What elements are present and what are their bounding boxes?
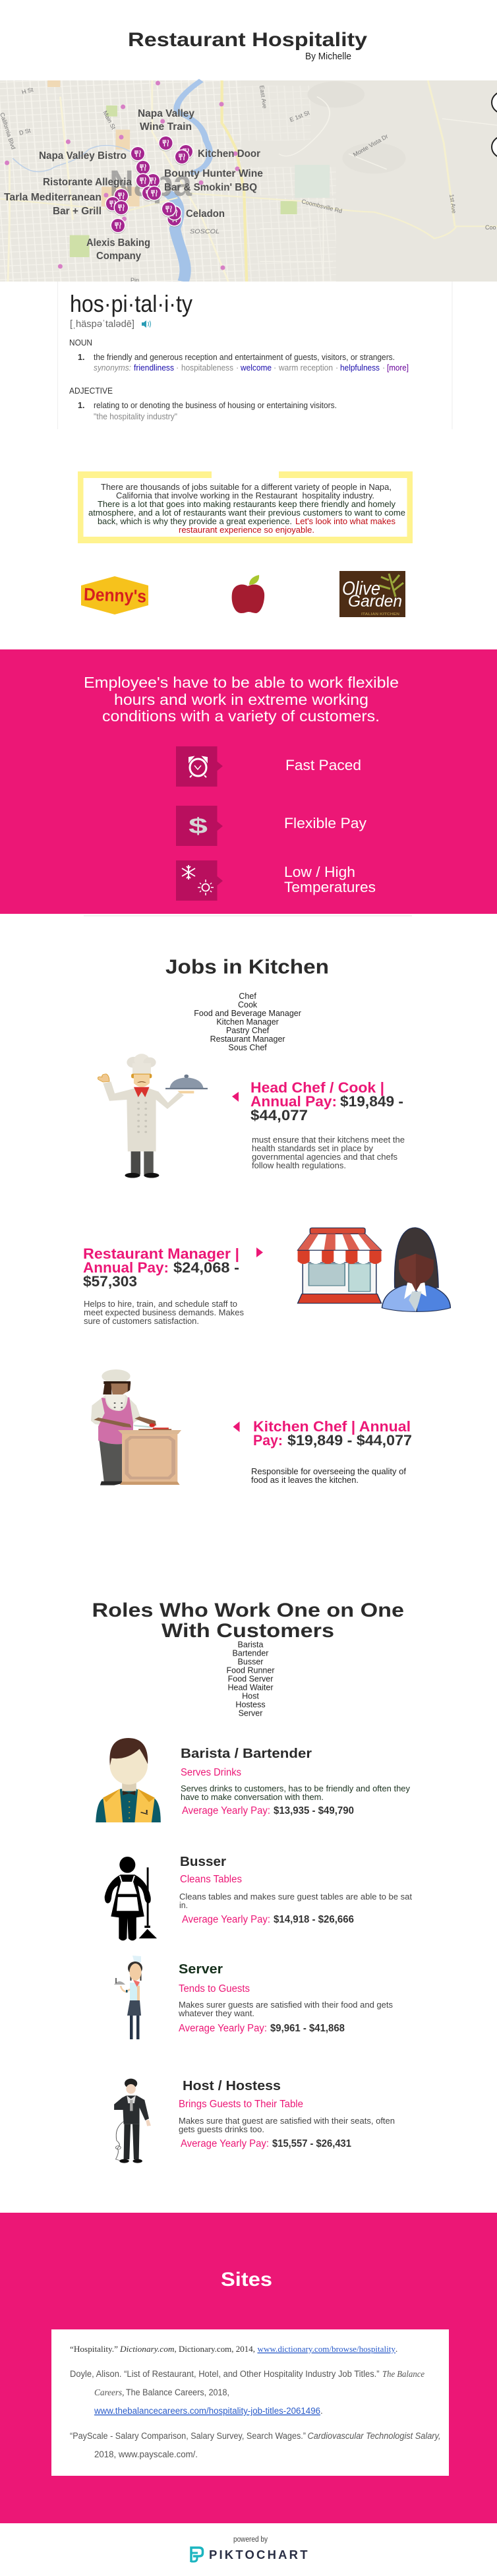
illustration: head chef with tray bbox=[98, 1054, 208, 1178]
server text bbox=[178, 1962, 393, 2034]
map of Napa restaurants: Monte Vista Dr bbox=[352, 133, 389, 158]
noun definition: hospitableness bbox=[181, 363, 233, 373]
label: Flexible Pay bbox=[284, 815, 366, 831]
citations box: “PayScale - Salary Comparison, Salary Survey, Search Wages.” bbox=[70, 2431, 306, 2441]
host text: Makes sure that guest are satisfied with their seats, often bbox=[179, 2116, 395, 2126]
statement: Employee's have to be able to work flexible bbox=[84, 674, 399, 691]
barista text: Serves drinks to customers, has to be friendly and often they bbox=[181, 1784, 411, 1793]
map of Napa restaurants: E 1st St bbox=[289, 109, 310, 123]
pronunciation: [ˌhäspəˈtalədē] bbox=[70, 318, 134, 330]
restaurant manager arrow bbox=[256, 1247, 263, 1257]
adjective definition: relating to or denoting the business of housing or entertaining visitors. bbox=[94, 401, 337, 410]
byline: By Michelle bbox=[305, 51, 351, 62]
busser text: $14,918 - $26,666 bbox=[274, 1914, 354, 1925]
restaurant manager description bbox=[84, 1300, 244, 1326]
label: Temperatures bbox=[284, 879, 376, 895]
citations box: Careers, bbox=[94, 2387, 124, 2397]
noun definition: the friendly and generous reception and entertainment of guests, visitors, or strangers. bbox=[94, 353, 395, 362]
noun definition: welcome bbox=[240, 363, 272, 373]
barista text: $13,935 - $49,790 bbox=[274, 1805, 354, 1816]
kitchen chef arrow bbox=[233, 1422, 240, 1432]
noun definition: · bbox=[176, 363, 179, 373]
kitchen chef pay bbox=[253, 1418, 412, 1449]
kitchen chef description: Responsible for overseeing the quality of bbox=[251, 1467, 407, 1476]
map of Napa restaurants bbox=[0, 80, 497, 284]
restaurant manager description: meet expected business demands. Makes bbox=[84, 1308, 244, 1317]
title: Restaurant Hospitality bbox=[128, 29, 367, 51]
illustration: host with microphone bbox=[114, 2079, 151, 2163]
server text: whatever they want. bbox=[178, 2009, 254, 2018]
icon: snowflake and sun bbox=[176, 860, 223, 901]
busser text: Average Yearly Pay: bbox=[182, 1914, 270, 1925]
logo: Denny's bbox=[81, 576, 148, 614]
head chef pay: Annual Pay: bbox=[250, 1093, 337, 1110]
map of Napa restaurants: Napa bbox=[109, 162, 192, 204]
map of Napa restaurants: 1st Ave bbox=[448, 194, 457, 214]
map of Napa restaurants: D St bbox=[18, 127, 32, 136]
host text: $15,557 - $26,431 bbox=[272, 2138, 351, 2149]
map of Napa restaurants: H St bbox=[21, 86, 34, 96]
noun definition: 1. bbox=[78, 353, 84, 362]
busser text: Cleans Tables bbox=[180, 1874, 242, 1885]
host text: gets guests drinks too. bbox=[179, 2125, 264, 2134]
citations box: . bbox=[395, 2344, 397, 2354]
list of customer roles: Server bbox=[239, 1709, 262, 1718]
citations box: “Hospitality.” bbox=[70, 2344, 118, 2354]
panel: dictionary definition bbox=[58, 282, 452, 429]
callout: introduction in yellow frame: California that involve working in the Restaurant hospitality industry. bbox=[116, 491, 374, 500]
kitchen chef pay: Kitchen Chef | Annual bbox=[253, 1418, 411, 1435]
server text: Makes surer guests are satisfied with their food and gets bbox=[179, 2000, 393, 2010]
list of kitchen jobs: Kitchen Manager bbox=[216, 1017, 279, 1027]
citations box: Dictionary.com bbox=[119, 2344, 174, 2354]
callout: introduction in yellow frame: There is a lot that goes into making restaurants keep there friendly and homely bbox=[98, 500, 396, 509]
logo: Applebee's apple bbox=[232, 575, 264, 613]
illustration: barista bbox=[96, 1738, 161, 1822]
callout: introduction in yellow frame bbox=[78, 471, 413, 543]
citations box: Cardiovascular Technologist Salary, bbox=[307, 2431, 440, 2441]
heading: roles bbox=[92, 1600, 404, 1642]
map of Napa restaurants: Wine Train bbox=[140, 121, 192, 133]
server text: Server bbox=[179, 1962, 223, 1977]
label bbox=[284, 864, 376, 895]
server text: Tends to Guests bbox=[179, 1983, 250, 1994]
list of customer roles: Host bbox=[242, 1692, 259, 1701]
callout: introduction in yellow frame: atmosphere, and a lot of restaurants want their previous customers to want to come bbox=[88, 508, 405, 518]
heading: Sites: Sites bbox=[221, 2269, 272, 2291]
footer: powered by: powered by bbox=[233, 2536, 268, 2544]
map of Napa restaurants: Napa Valley bbox=[138, 108, 194, 119]
noun definition: synonyms: bbox=[94, 363, 131, 373]
icon: dollar: $ bbox=[189, 814, 208, 838]
host text: Average Yearly Pay: bbox=[181, 2138, 269, 2149]
restaurant manager pay: Annual Pay: bbox=[83, 1259, 169, 1276]
list of kitchen jobs: Pastry Chef bbox=[226, 1026, 270, 1035]
map of Napa restaurants: SOSCOL bbox=[190, 228, 219, 235]
busser text: Cleans tables and makes sure guest tables are able to be sat bbox=[179, 1892, 413, 1902]
list of customer roles: Food Server bbox=[228, 1675, 273, 1684]
head chef description: governmental agencies and that chefs bbox=[252, 1153, 397, 1162]
head chef pay: Head Chef / Cook | bbox=[250, 1079, 384, 1096]
citations box: www.dictionary.com/browse/hospitality bbox=[257, 2344, 395, 2354]
callout: introduction in yellow frame: restaurant experience so enjoyable. bbox=[179, 525, 314, 535]
citations box: www.thebalancecareers.com/hospitality-job-titles-2061496 bbox=[94, 2406, 320, 2416]
list of kitchen jobs: Restaurant Manager bbox=[210, 1034, 285, 1044]
heading: roles: With Customers bbox=[161, 1620, 334, 1642]
icon: speaker bbox=[142, 320, 150, 328]
illustration: storefront and manager bbox=[298, 1228, 450, 1311]
map of Napa restaurants: Alexis Baking bbox=[86, 237, 150, 249]
barista text: have to make conversation with them. bbox=[181, 1793, 324, 1802]
map of Napa restaurants: Coombsville Rd bbox=[301, 198, 343, 214]
kitchen chef description bbox=[251, 1467, 407, 1485]
map of Napa restaurants: East Ave bbox=[258, 85, 268, 109]
restaurant manager description: Helps to hire, train, and schedule staff to bbox=[84, 1300, 237, 1309]
map of Napa restaurants: Coo bbox=[485, 224, 496, 231]
head chef pay: $19,849 - bbox=[340, 1093, 403, 1110]
list of kitchen jobs: Sous Chef bbox=[228, 1043, 267, 1052]
logo: Denny's: Denny's bbox=[84, 584, 146, 607]
illustration: kitchen chef at counter bbox=[91, 1369, 181, 1485]
panel: sites bbox=[0, 2213, 497, 2523]
citations box: Doyle, Alison. “List of Restaurant, Hotel, and Other Hospitality Industry Job Titles.” bbox=[70, 2369, 380, 2379]
list of customer roles bbox=[227, 1640, 274, 1718]
head chef description: follow health regulations. bbox=[252, 1161, 346, 1170]
adjective definition bbox=[69, 386, 337, 421]
busser text: in. bbox=[179, 1901, 188, 1910]
noun definition: helpfulness bbox=[340, 363, 380, 373]
noun definition bbox=[69, 338, 409, 373]
kitchen chef pay: $19,849 - $44,077 bbox=[287, 1432, 412, 1449]
heading: roles: Roles Who Work One on One bbox=[92, 1600, 404, 1621]
icon: alarm clock bbox=[176, 746, 223, 787]
noun definition: · bbox=[236, 363, 239, 373]
server text: $9,961 - $41,868 bbox=[270, 2023, 345, 2034]
noun definition: NOUN bbox=[69, 338, 92, 347]
restaurant manager description: sure of customers satisfaction. bbox=[84, 1317, 199, 1326]
callout: introduction in yellow frame: Let's look into what makes bbox=[295, 517, 395, 526]
map of Napa restaurants: Company bbox=[96, 251, 141, 262]
citations box: 2018, www.payscale.com/. bbox=[94, 2449, 198, 2459]
noun definition: warm reception bbox=[278, 363, 333, 373]
barista text: Average Yearly Pay: bbox=[182, 1805, 270, 1816]
logo: Olive Garden bbox=[339, 571, 405, 617]
head chef arrow bbox=[232, 1092, 239, 1102]
headword: hos·pi·tal·i·ty bbox=[70, 290, 192, 317]
map of Napa restaurants: Celadon bbox=[186, 208, 225, 220]
kitchen chef description: food as it leaves the kitchen. bbox=[251, 1476, 359, 1485]
list of customer roles: Food Runner bbox=[227, 1665, 274, 1675]
noun definition: · bbox=[382, 363, 385, 373]
citations box: The Balance Careers, 2018, bbox=[126, 2387, 229, 2397]
busser text: Busser bbox=[180, 1855, 226, 1869]
restaurant manager pay: Restaurant Manager | bbox=[83, 1245, 239, 1262]
statement: hours and work in extreme working bbox=[114, 691, 368, 708]
barista text: Serves Drinks bbox=[181, 1767, 241, 1778]
statement: conditions with a variety of customers. bbox=[102, 707, 380, 725]
map of Napa restaurants: Bounty Hunter Wine bbox=[164, 168, 263, 179]
map of Napa restaurants: Tarla Mediterranean bbox=[4, 192, 102, 203]
head chef pay: $44,077 bbox=[250, 1107, 308, 1123]
list of kitchen jobs: Chef bbox=[239, 992, 256, 1001]
head chef description: health standards set in place by bbox=[252, 1144, 374, 1153]
noun definition: friendliness bbox=[134, 363, 174, 373]
citations box: The Balance bbox=[382, 2369, 424, 2379]
head chef description: must ensure that their kitchens meet the bbox=[252, 1135, 405, 1145]
map of Napa restaurants: Bar & Smokin' BBQ bbox=[164, 182, 257, 193]
list of customer roles: Hostess bbox=[235, 1700, 266, 1709]
list of customer roles: Busser bbox=[238, 1658, 263, 1667]
callout: introduction in yellow frame: There are thousands of jobs suitable for a different variety of people in Napa, bbox=[101, 483, 392, 492]
heading: Jobs in Kitchen: Jobs in Kitchen bbox=[165, 955, 329, 978]
restaurant manager pay: $24,068 - bbox=[173, 1259, 239, 1276]
map of Napa restaurants: Bar + Grill bbox=[53, 206, 102, 217]
citations box: , Dictionary.com, 2014, bbox=[174, 2344, 255, 2354]
citations box bbox=[51, 2329, 449, 2476]
list of customer roles: Head Waiter bbox=[227, 1683, 274, 1692]
panel: working conditions bbox=[0, 649, 497, 914]
callout: introduction in yellow frame: back, which is why they provide a great experience. bbox=[98, 517, 292, 526]
map of Napa restaurants: Kitchen Door bbox=[198, 148, 260, 160]
list of kitchen jobs: Cook bbox=[238, 1000, 258, 1009]
map of Napa restaurants: Ristorante Allegria bbox=[43, 177, 132, 188]
restaurant manager pay bbox=[83, 1245, 239, 1290]
kitchen chef pay: Pay: bbox=[253, 1432, 283, 1449]
logo: Olive Garden: ITALIAN KITCHEN bbox=[361, 613, 399, 616]
adjective definition: ADJECTIVE bbox=[69, 386, 113, 396]
busser text bbox=[179, 1855, 413, 1925]
restaurant manager pay: $57,303 bbox=[83, 1273, 137, 1290]
footer: Piktochart logo: PIKTOCHART bbox=[209, 2548, 308, 2561]
illustration: busser with broom bbox=[105, 1857, 157, 1940]
host text bbox=[179, 2079, 395, 2149]
illustration: server with tray bbox=[114, 1956, 142, 2039]
map of Napa restaurants: Main St bbox=[102, 109, 117, 131]
server text: Average Yearly Pay: bbox=[179, 2023, 267, 2034]
noun definition: · bbox=[336, 363, 338, 373]
host text: Brings Guests to Their Table bbox=[179, 2099, 303, 2110]
citations box: . bbox=[320, 2406, 323, 2416]
logo: Olive Garden: Garden bbox=[348, 592, 402, 611]
host text: Host / Hostess bbox=[183, 2079, 281, 2093]
list of customer roles: Barista bbox=[238, 1640, 263, 1650]
head chef pay bbox=[250, 1079, 403, 1123]
barista text: Barista / Bartender bbox=[181, 1747, 312, 1761]
head chef description bbox=[252, 1135, 405, 1170]
map of Napa restaurants: Pin bbox=[131, 277, 139, 284]
label: Low / High bbox=[284, 864, 355, 880]
adjective definition: "the hospitality industry" bbox=[94, 412, 177, 421]
logo: Olive Garden: Olive bbox=[342, 578, 380, 599]
label: Fast Paced bbox=[285, 757, 361, 773]
list of customer roles: Bartender bbox=[233, 1648, 268, 1658]
adjective definition: 1. bbox=[78, 401, 84, 410]
list of kitchen jobs: Food and Beverage Manager bbox=[194, 1009, 301, 1018]
barista text bbox=[181, 1747, 411, 1816]
list of kitchen jobs bbox=[194, 992, 301, 1052]
icon: dollar bbox=[176, 806, 223, 846]
noun definition: · bbox=[274, 363, 276, 373]
noun definition: [more] bbox=[387, 363, 409, 373]
statement bbox=[84, 674, 399, 725]
map of Napa restaurants: Napa Valley Bistro bbox=[39, 150, 127, 162]
